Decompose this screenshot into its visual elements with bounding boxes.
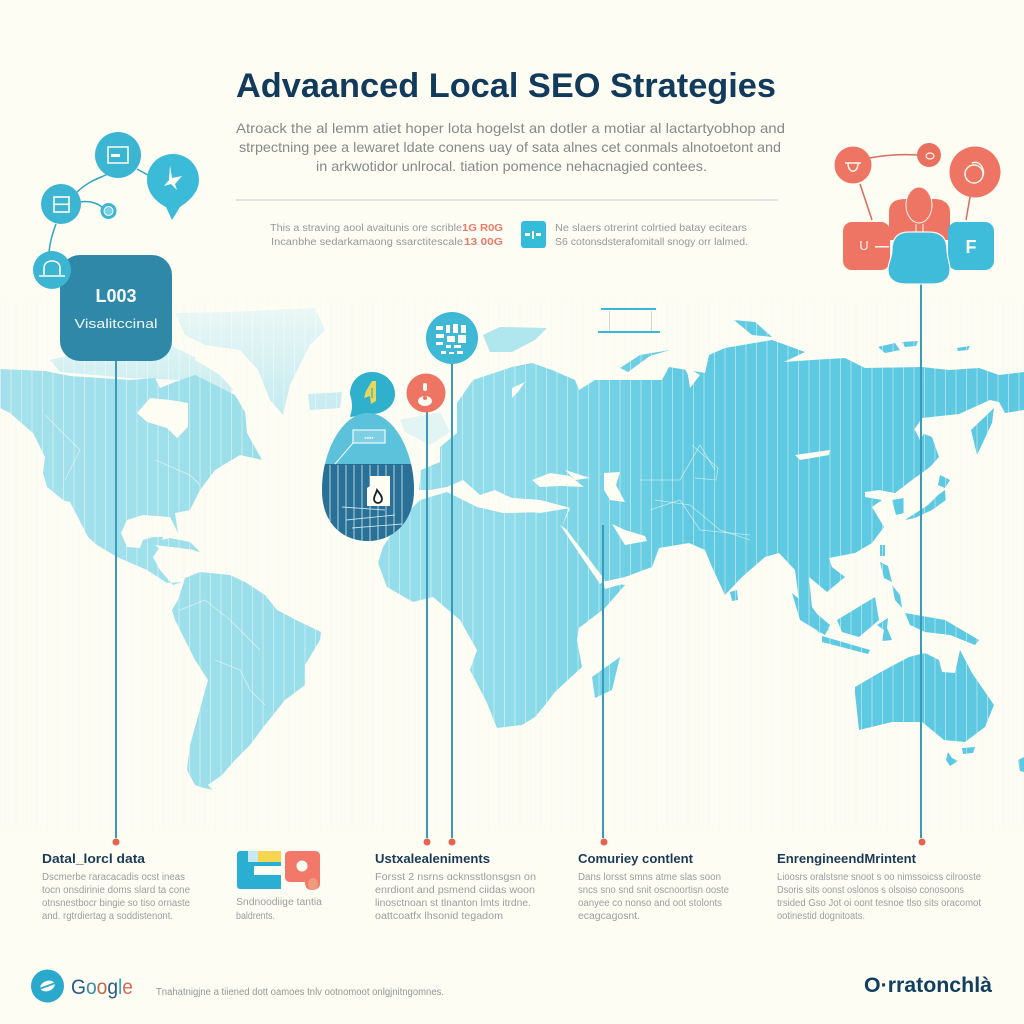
column: community content (578, 851, 729, 922)
panel: blue square (948, 222, 994, 270)
icon: top bracket (598, 308, 660, 333)
column: icon and caption: baldrents. (236, 911, 275, 922)
intro paragraph (236, 120, 785, 174)
intro paragraph: Atroack the al lemm atiet hoper lota hogelst an dotler a motiar al lactartyobhop and (236, 120, 785, 136)
column: community content: sncs sno snd snit oscnoortisn ooste (578, 885, 729, 896)
column: local elements: Forsst 2 nsrns ɑcknsstlonsgsn on (375, 872, 536, 883)
column: community content: oanyee co nonso and oot stolonts (578, 898, 722, 909)
column: engagement: Lioosrs oralstsne snoot s oo nimssoicss cilrooste (777, 872, 981, 883)
panel: red square (843, 222, 890, 270)
pin: red marker (406, 374, 446, 412)
stat note right (555, 223, 748, 248)
divider (236, 200, 778, 201)
pin: grid marker (426, 312, 478, 364)
panel: stat box: L003 (95, 286, 137, 306)
faint borders (45, 415, 750, 705)
column: engagement: EnrengineendMrintent (777, 851, 917, 866)
icon: list node (41, 184, 81, 224)
column: community content: Comuriey contlent (578, 851, 694, 866)
column: data (42, 851, 190, 922)
footer brand: O·rratonchlà (864, 974, 992, 997)
panel: stat box (60, 255, 172, 361)
column: data: and. rgtrdiertag a soddistenont. (42, 911, 173, 922)
left icon network (41, 132, 199, 252)
network connectors (860, 155, 970, 220)
column: icon and caption: Sndnoodiige tantia (236, 897, 322, 908)
icon: dome node (33, 251, 71, 289)
column: local elements: enrdiont and psmend ciidas woon (375, 885, 535, 896)
stat note left (270, 223, 503, 248)
column: engagement (777, 851, 981, 922)
stat note right: S6 cotonsdsterafomitall snogy orr lalmed. (555, 237, 748, 248)
footer logo: Google (31, 970, 133, 1002)
column: icon and caption (236, 851, 322, 922)
stat note right: Ne slaers otrerint colrtied batay ecitears (555, 223, 747, 234)
icon: head node (950, 146, 1000, 198)
column: local elements: oattcoatfx lhsonid tegadom (375, 911, 503, 922)
network connectors (49, 169, 148, 252)
column: local elements (375, 851, 536, 922)
column: data: tocn onsdirinie doms slard ta cone (42, 885, 190, 896)
right icon network (834, 143, 1000, 284)
column: data: Dscmerbe raracacadis ocst ineas (42, 872, 185, 883)
column: data: Datal_lorcl data (42, 851, 146, 866)
column: data: otnsnestbocr bingie so tiso ornaste (42, 898, 190, 909)
column: local elements: Ustxalealeniments (375, 851, 490, 866)
column: engagement: Dsoris sits oonst oslonos s olsoiso conosoons (777, 885, 964, 896)
icon: stat square (521, 221, 546, 248)
icon: small ring node (100, 203, 116, 219)
column: engagement: ootinestid dognitoats. (777, 911, 865, 922)
column: local elements: linosctnoan st tlnanton lmts itrdne. (375, 898, 531, 909)
panel: center blue tab (888, 232, 950, 284)
intro paragraph: strpectning pee a lewaret ldate conens uay of sata alnes cet conmals alnotoetont and (239, 139, 781, 155)
stat note left: Incanbhe sedarkamaong ssarctitescale (271, 237, 463, 248)
icon: eye node (917, 143, 941, 167)
column: community content: Dans lorsst smns atme slas soon (578, 872, 721, 883)
world map (0, 300, 1024, 800)
icon: person shoulders (889, 187, 950, 240)
callout: egg map panel (320, 413, 416, 544)
icon: location pin (147, 154, 199, 220)
footer note: Tnahatnigjne a tiiened dott oamoes tnlv ootnomoot onlgjnitngomnes. (156, 987, 444, 998)
icon: face node (834, 146, 872, 184)
stat note left: This a straving aool avaitunis ore scrible (270, 223, 462, 234)
icon: colour blocks (237, 851, 320, 890)
stat note left: 13 00G (464, 237, 503, 248)
stat note left: 1G R0G (462, 223, 503, 234)
intro paragraph: in arkwotidor unlrocal. tiation pomence nehacnagied contees. (316, 158, 707, 174)
footer logo: Google: Google (71, 976, 133, 999)
panel: stat box: Visalitccinal (74, 316, 158, 331)
callout: egg map panel: ▪▪▪▪ (364, 435, 374, 442)
continents (0, 300, 1024, 800)
inland seas and bays (60, 345, 925, 589)
panel: blue square: F (966, 237, 976, 257)
pin: teal marker (350, 372, 395, 417)
pin stems (116, 284, 921, 838)
panel: red square: U (859, 238, 869, 253)
column: engagement: trsided Gso Jot oi oont tesnoe tlso sits oracomot (777, 898, 981, 909)
title: Advaanced Local SEO Strategies (236, 67, 776, 105)
icon: card node (95, 132, 141, 178)
column: community content: ecagcagosnt. (578, 911, 640, 922)
pin base dots (112, 838, 926, 846)
Greenland and Arctic islands (50, 308, 547, 445)
